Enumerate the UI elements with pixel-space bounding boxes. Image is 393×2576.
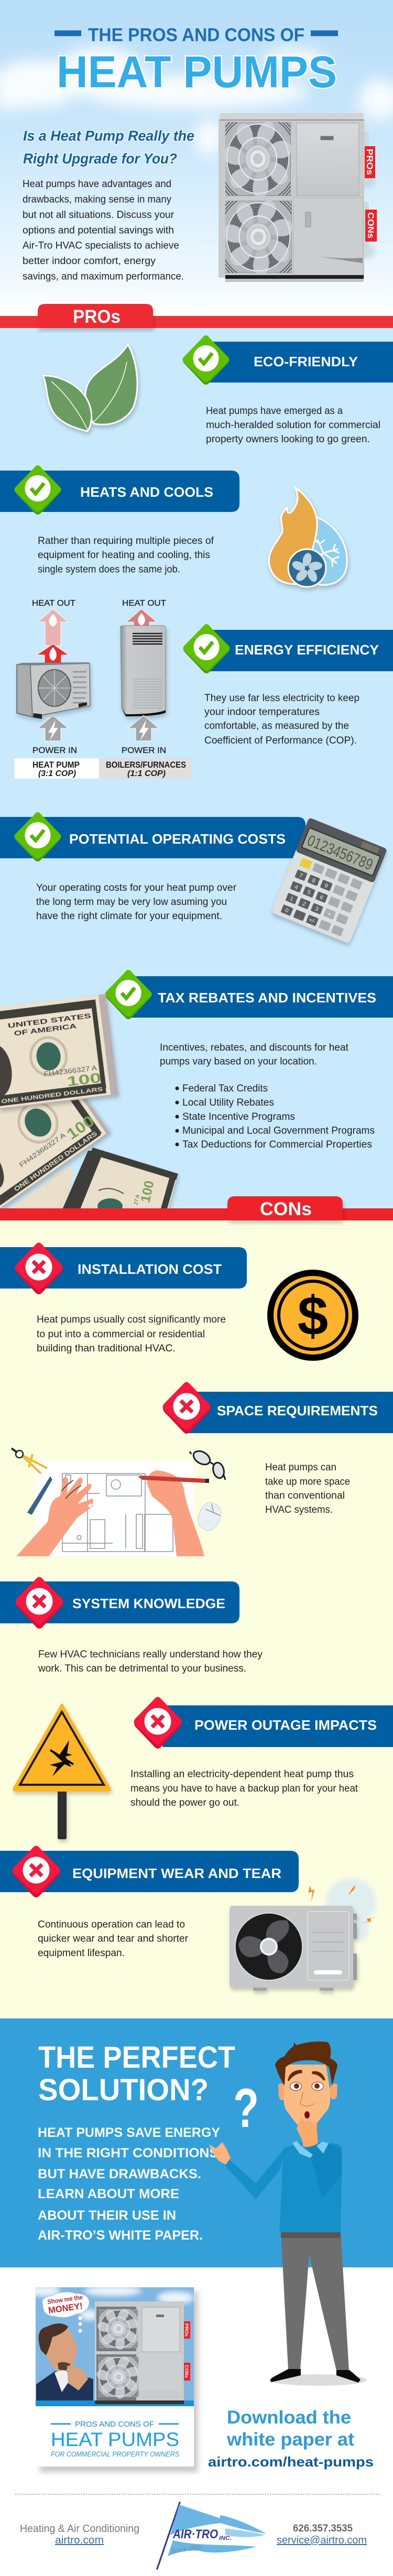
intro text: options and potential savings with: [23, 225, 174, 236]
icon: x mark: [16, 1577, 63, 1629]
intro text: but not all situations. Discuss your: [23, 210, 174, 221]
heading bar: [162, 1705, 393, 1747]
bill 1: 100: [66, 1069, 102, 1089]
text: work. This can be detrimental to your business.: [38, 1663, 246, 1674]
tag: CONs: CONs: [366, 212, 376, 238]
bullet list: Tax Deductions for Commercial Properties: [182, 1139, 372, 1150]
text: equipment lifespan.: [38, 1948, 125, 1959]
text: Continuous operation can lead to: [38, 1919, 185, 1930]
heading bar: TAX REBATES AND INCENTIVES: [158, 990, 376, 1006]
illustration: heat pump unit: [219, 113, 377, 282]
table cell: boilers: [99, 758, 192, 779]
heading bar: ECO-FRIENDLY: [254, 354, 358, 369]
trousers: [281, 2231, 349, 2371]
heading bar: SYSTEM KNOWLEDGE: [72, 1596, 225, 1611]
table cell: heat pump: (3:1 COP): [38, 769, 76, 778]
head: [283, 2065, 330, 2126]
panel: tax rebates and incentives: [0, 970, 393, 1214]
text: Heat pumps can: [265, 1462, 336, 1473]
text: the long term may be very low asuming you: [36, 897, 227, 908]
icon: check: [15, 465, 61, 515]
white paper cover: [29, 2285, 198, 2472]
heading bar: [189, 1392, 393, 1433]
table cell: boilers: BOILERS/FURNACES: [106, 760, 186, 770]
text: Heat pumps have emerged as a: [206, 406, 343, 417]
heading bar: HEATS AND COOLS: [80, 484, 213, 500]
text: HVAC systems.: [265, 1504, 333, 1515]
illustration: calculator: +/-: [308, 916, 316, 925]
illustration: calculator: .: [298, 913, 301, 919]
icon: check: [105, 970, 152, 1019]
title: [54, 25, 338, 97]
text: [206, 406, 380, 445]
text: take up more space: [265, 1477, 350, 1487]
text: IN THE RIGHT CONDITIONS,: [38, 2146, 222, 2160]
text: Rather than requiring multiple pieces of: [38, 536, 214, 547]
heading bar: [210, 342, 393, 383]
logo: Air-Tro: AIR·TRO: [172, 2527, 218, 2541]
text: [38, 536, 214, 575]
text: to put into a commercial or residential: [37, 1329, 205, 1340]
illustration: calculator: 3: [314, 905, 320, 913]
sweater: [279, 2142, 342, 2232]
bill 3: [62, 1148, 180, 1208]
icon: flame and snowflake: [269, 488, 347, 587]
illustration: calculator: +: [326, 911, 332, 918]
shadow: [269, 2374, 367, 2386]
panel: installation cost: [0, 1243, 358, 1361]
text: means you have to have a backup plan for your heat: [130, 1783, 358, 1794]
illustration: calculator: [271, 817, 387, 944]
illustration: thinking man: [209, 2042, 367, 2386]
illustration: heat pump outdoor unit: [17, 662, 90, 719]
left hand creases: [62, 1480, 81, 1499]
label: power in 2: POWER IN: [122, 746, 166, 755]
eyes: [290, 2082, 323, 2091]
bill 1: FH42366327 A: [43, 1064, 97, 1078]
cover title: FOR COMMERCIAL PROPERTY OWNERS: [51, 2450, 180, 2458]
title rule left: [54, 30, 81, 36]
text: AIR-TRO’S WHITE PAPER.: [38, 2228, 203, 2243]
text: Few HVAC technicians really understand how they: [38, 1649, 263, 1660]
heading bar: [0, 1247, 247, 1289]
cover man: [36, 2323, 93, 2400]
logo: Air-Tro: [156, 2502, 266, 2570]
text: Coefficient of Performance (COP).: [204, 735, 357, 746]
bill 1: OF AMERICA: [14, 1022, 78, 1038]
intro question heading: [23, 128, 194, 167]
nose: [300, 2092, 314, 2106]
bullet list: Municipal and Local Government Programs: [182, 1126, 375, 1136]
left arm: [225, 2147, 286, 2199]
heading: THE PERFECT: [38, 2040, 235, 2075]
text: [38, 1649, 263, 1674]
shoes: [270, 2369, 361, 2383]
section banner: PROs: [0, 304, 393, 328]
download call to action: airtro.com/heat-pumps: [208, 2454, 374, 2470]
intro question heading: Is a Heat Pump Really the: [23, 128, 194, 144]
footer left text: Heating & Air Conditioning: [20, 2523, 139, 2535]
title rule right: [311, 30, 338, 36]
illustration: calculator: 8: [311, 877, 316, 885]
heading bar: [0, 817, 305, 858]
ears: [278, 2083, 337, 2100]
heading bar: [131, 976, 393, 1018]
arrow: power in 1: [38, 715, 68, 741]
footer right text: [277, 2523, 367, 2546]
text: [38, 1919, 189, 1959]
text: Your operating costs for your heat pump over: [36, 882, 237, 893]
cover tags: CONs: [184, 2365, 189, 2378]
icon: check: [182, 335, 230, 385]
bill 1: UNITED STATES: [7, 1012, 92, 1030]
footer: [20, 2502, 367, 2570]
cover shadow: [40, 2291, 198, 2472]
text: than conventional: [265, 1490, 345, 1501]
footer left text: airtro.com: [55, 2535, 104, 2546]
text: [160, 1042, 349, 1067]
bill 2: ONE HUNDRED DOLLARS: [13, 1130, 99, 1193]
illustration: calculator: 4: [293, 884, 299, 891]
cover title: PROS AND CONS OF: [75, 2420, 154, 2429]
bullet list: [175, 1083, 375, 1150]
text: equipment for heating and cooling, this: [38, 550, 210, 561]
text: have the right climate for your equipment.: [36, 911, 222, 922]
cover thought bubble: MONEY!: [48, 2301, 83, 2316]
heading bar: ENERGY EFFICIENCY: [235, 642, 379, 658]
heading bar: [0, 471, 239, 512]
text: comfortable, as measured by the: [204, 721, 349, 732]
right hand: [147, 1470, 204, 1556]
footer left text: [20, 2523, 139, 2546]
blue pen: [28, 1478, 51, 1514]
intro text: drawbacks, making sense in many: [23, 194, 171, 205]
section banner: PROs: PROs: [73, 307, 121, 327]
cover thought bubble: [42, 2292, 89, 2333]
neck: [301, 2125, 318, 2147]
label: heat out 1: HEAT OUT: [32, 599, 75, 608]
bullet list: Local Utility Rebates: [182, 1097, 274, 1108]
bullet list: Federal Tax Credits: [182, 1083, 268, 1094]
diagram: heat pump vs boilers COP: [14, 599, 192, 779]
text: pumps vary based on your location.: [160, 1056, 317, 1067]
intro text: better indoor comfort, energy: [23, 256, 156, 267]
text: building than traditional HVAC.: [37, 1343, 176, 1354]
icon: warning sign: [13, 1704, 111, 1839]
logo: Air-Tro: Since 1969: [171, 2544, 202, 2555]
bill 2: 100: [63, 1112, 97, 1143]
icon: x mark: [134, 1697, 181, 1749]
table cell: boilers: (1:1 COP): [127, 769, 166, 778]
hair: [275, 2042, 337, 2086]
panel: heats and cools: [0, 465, 347, 587]
mouse: [198, 1502, 221, 1531]
text: [36, 882, 237, 922]
left hand: [16, 1477, 93, 1556]
text: ABOUT THEIR USE IN: [38, 2208, 176, 2223]
mouth: [304, 2111, 310, 2119]
panel: system knowledge: [0, 1577, 263, 1674]
cover page: [36, 2287, 194, 2466]
intro question heading: Right Upgrade for You?: [23, 150, 177, 167]
illustration: calculator: 0123456789: [305, 832, 375, 874]
tag: CONs: [365, 210, 377, 242]
text: HEAT PUMPS SAVE ENERGY: [38, 2125, 220, 2140]
download call to action: Download the: [227, 2407, 351, 2428]
download call to action: [208, 2407, 374, 2470]
left hand: [209, 2142, 231, 2165]
sky background: [0, 0, 393, 320]
panel: equipment wear and tear: [0, 1846, 380, 1991]
text: quicker wear and tear and shorter: [38, 1934, 189, 1944]
heading bar: [210, 630, 393, 671]
text: [38, 2125, 222, 2243]
bullet list: State Incentive Programs: [182, 1111, 295, 1122]
bill 3: 100: [138, 1180, 157, 1204]
red pencil: [138, 1476, 209, 1483]
collar: [292, 2141, 329, 2158]
icon: check: [15, 812, 61, 861]
belt line: [281, 2231, 341, 2238]
text: [37, 1314, 226, 1354]
arrow: heat pump output faded: [38, 609, 68, 646]
text: should the power go out.: [130, 1797, 239, 1808]
arrow: heat pump output: [37, 644, 69, 663]
footer right text: service@airtro.com: [277, 2535, 367, 2546]
bill 2: [0, 1098, 113, 1208]
illustration: calculator: 2: [301, 901, 307, 908]
panel: eco-friendly: [43, 335, 393, 445]
icon: dollar coin: [267, 1270, 358, 1361]
blueprint paper: [35, 1462, 193, 1556]
text: They use far less electricity to keep: [204, 693, 359, 704]
bill 2: FH42366327 A: [18, 1131, 67, 1169]
heading bar: EQUIPMENT WEAR AND TEAR: [72, 1865, 281, 1881]
label: heat out 2: HEAT OUT: [122, 599, 166, 608]
heading: SOLUTION?: [38, 2073, 209, 2107]
table cell: heat pump: [14, 758, 99, 779]
compass: [12, 1448, 47, 1473]
text: [265, 1462, 350, 1515]
illustration: calculator: 1: [289, 896, 294, 902]
download call to action: white paper at: [226, 2429, 354, 2450]
icon: x mark: [13, 1846, 60, 1897]
illustration: calculator: 6: [319, 894, 324, 901]
panel background: cons: [0, 1220, 393, 2018]
icon: question mark: ?: [233, 2078, 259, 2139]
bill 1: [0, 994, 118, 1111]
intro text: [23, 179, 184, 282]
heading: [38, 2040, 235, 2107]
illustration: floor plan with hands: [12, 1448, 226, 1556]
text: much-heralded solution for commercial: [206, 420, 380, 431]
bill 4 corner: [10, 1166, 74, 1208]
title line 1: THE PROS AND CONS OF: [88, 25, 304, 45]
text: BUT HAVE DRAWBACKS.: [38, 2167, 201, 2181]
heading bar: [0, 1581, 239, 1623]
intro text: savings, and maximum performance.: [23, 271, 184, 282]
icon: x mark: [162, 1382, 211, 1434]
cover thought bubble: Show me the: [47, 2294, 83, 2306]
title line 2: HEAT PUMPS: [57, 47, 337, 97]
heading bar: POTENTIAL OPERATING COSTS: [69, 831, 286, 847]
illustration: money stacks: [0, 994, 178, 1214]
glasses: [190, 1448, 226, 1480]
brows: [288, 2070, 325, 2081]
intro text: Heat pumps have advantages and: [23, 179, 171, 190]
intro text: Air-Tro HVAC specialists to achieve: [23, 240, 179, 252]
panel: the perfect solution: [0, 2018, 393, 2267]
clouds: [0, 47, 393, 155]
arrow: boiler output: [126, 609, 157, 629]
heading bar: [0, 1851, 299, 1892]
text: property owners looking to go green.: [206, 434, 370, 445]
illustration: calculator: 5: [306, 889, 311, 896]
right forearm: [307, 2142, 342, 2198]
panel: space requirements: [12, 1382, 393, 1556]
illustration: overheating outdoor unit: [230, 1878, 380, 1991]
cover title: [51, 2420, 180, 2458]
icon: flames: [49, 613, 145, 661]
cover photo sky: [36, 2287, 194, 2400]
tag: PROs: PROs: [365, 149, 375, 175]
bill 3: 27 A: [133, 1194, 141, 1206]
hand on chin: [297, 2117, 318, 2142]
table cell: heat pump: HEAT PUMP: [32, 760, 80, 770]
cover tags: [184, 2321, 190, 2381]
illustration: calculator: 7: [298, 872, 303, 879]
text: Heat pumps usually cost significantly more: [37, 1314, 226, 1325]
text: single system does the same job.: [38, 564, 180, 575]
heading bar: POWER OUTAGE IMPACTS: [194, 1717, 377, 1733]
cover tags: PROs: [184, 2323, 189, 2337]
text: Installing an electricity-dependent heat pump thus: [130, 1769, 354, 1780]
text: your indoor temperatures: [204, 706, 320, 718]
floor plan lines: [62, 1473, 173, 1552]
panel background: [0, 2018, 393, 2267]
illustration: calculator: 0: [284, 907, 289, 914]
panel: power outage impacts: [13, 1697, 393, 1839]
icon: leaves: [43, 344, 137, 431]
text: LEARN ABOUT MORE: [38, 2187, 179, 2201]
footer right text: 626.357.3535: [293, 2523, 353, 2534]
text: [204, 693, 359, 746]
cover clouds: [29, 2285, 194, 2320]
logo: Air-Tro: INC.: [219, 2535, 232, 2541]
icon: sparks: [308, 1885, 380, 1923]
panel: energy efficiency: [183, 624, 393, 746]
label: power in 1: POWER IN: [32, 746, 77, 755]
heading bar: SPACE REQUIREMENTS: [217, 1403, 378, 1418]
heading bar: INSTALLATION COST: [78, 1261, 222, 1277]
text: Incentives, rebates, and discounts for heat: [160, 1042, 349, 1053]
icon: x mark: [15, 1243, 63, 1294]
illustration: calculator: 9: [323, 882, 329, 889]
bill 1: ONE HUNDRED DOLLARS: [1, 1086, 103, 1105]
icon: dollar coin: $: [298, 1285, 328, 1347]
section banner: CONs: [0, 1196, 393, 1220]
illustration: boiler tower: [121, 626, 166, 716]
arrow: power in 2: [128, 715, 159, 741]
text: [130, 1769, 358, 1808]
icon: check: [183, 624, 230, 673]
cover blue strip: [36, 2400, 194, 2406]
cover title: HEAT PUMPS: [51, 2429, 179, 2450]
section banner: CONs: CONs: [260, 1199, 312, 1219]
panel background: pros: [0, 328, 393, 1208]
cover pump: [95, 2301, 184, 2404]
panel: potential operating costs: [0, 812, 387, 944]
